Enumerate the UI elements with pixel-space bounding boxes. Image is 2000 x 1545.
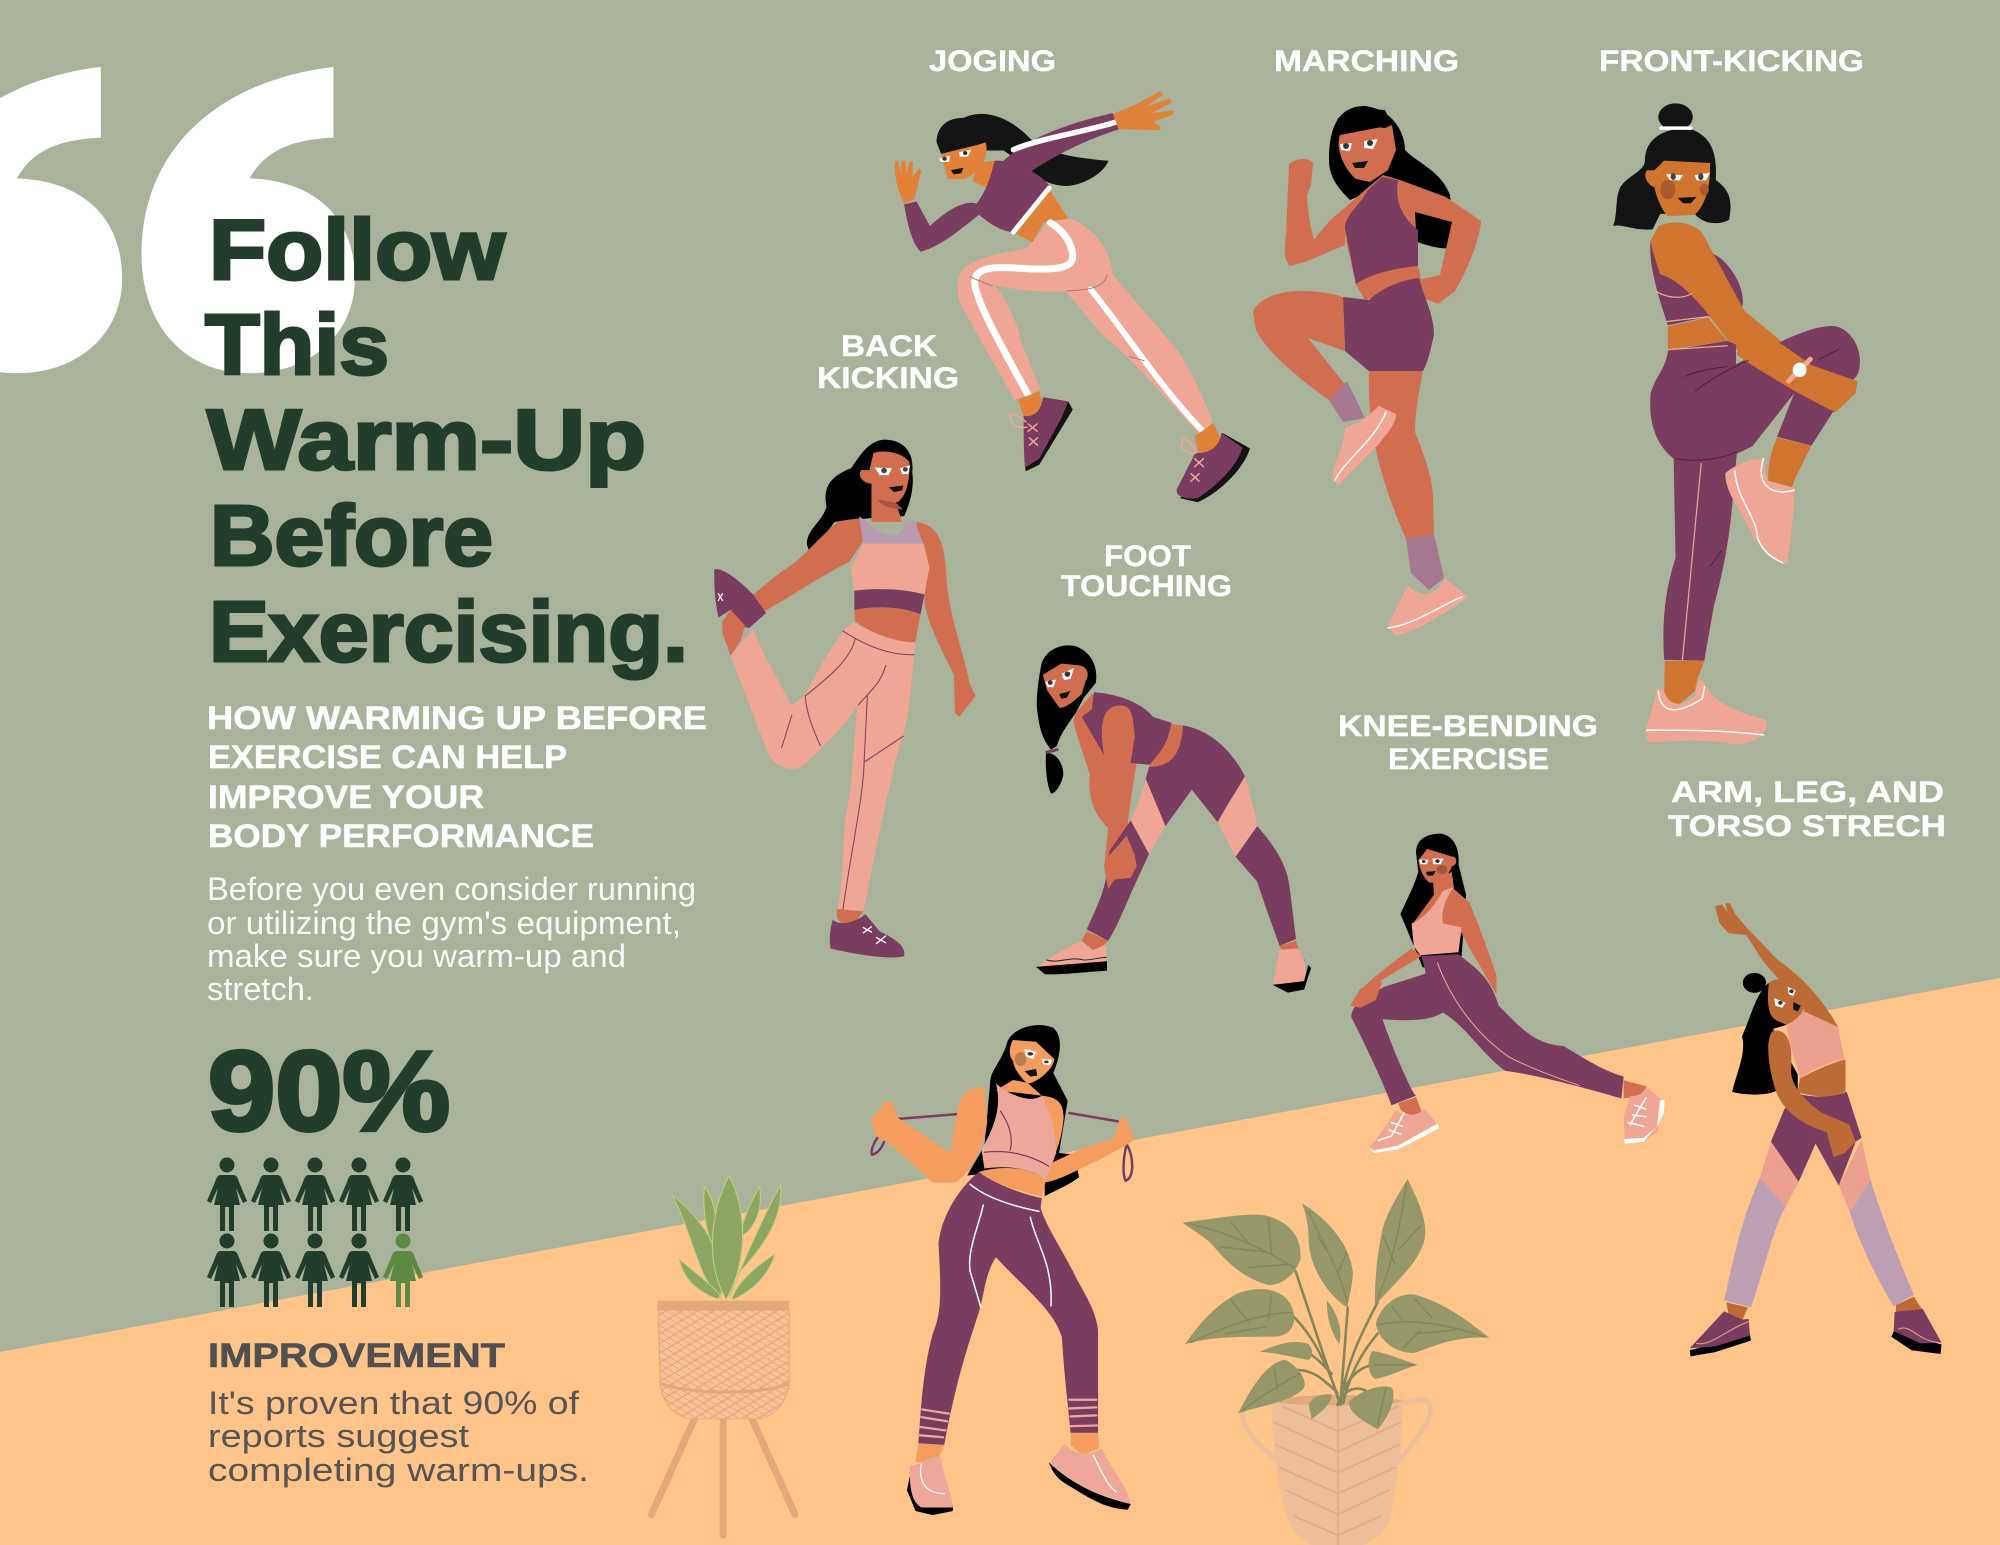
label: foot touching: TOUCHING xyxy=(1061,570,1232,603)
figure: arm, leg and torso stretch xyxy=(1690,903,1941,1356)
label: arm, leg and torso stretch: TORSO STRECH xyxy=(1668,810,1946,843)
floor diagonal xyxy=(0,978,2000,1545)
intro text: stretch. xyxy=(207,971,314,1007)
plant: leafy plant in vase xyxy=(1182,1179,1490,1545)
label: knee-bending exercise xyxy=(1338,710,1598,776)
subheading: EXERCISE CAN HELP xyxy=(208,739,567,775)
improvement text: completing warm-ups. xyxy=(208,1452,589,1488)
title: Follow xyxy=(209,203,506,298)
subheading xyxy=(207,700,707,854)
title: This xyxy=(205,298,389,393)
subheading: BODY PERFORMANCE xyxy=(208,818,594,854)
title: Before xyxy=(210,489,493,584)
figure: jogging xyxy=(895,91,1250,502)
title xyxy=(205,203,688,680)
intro text: make sure you warm-up and xyxy=(207,938,626,974)
improvement text: It's proven that 90% of xyxy=(208,1385,579,1421)
label: knee-bending exercise: EXERCISE xyxy=(1388,743,1549,776)
improvement heading: IMPROVEMENT xyxy=(208,1337,505,1375)
improvement text: reports suggest xyxy=(208,1418,469,1454)
label: knee-bending exercise: KNEE-BENDING xyxy=(1338,710,1598,743)
subheading: IMPROVE YOUR xyxy=(208,779,484,815)
stat: 90%: 90% xyxy=(208,1028,450,1154)
label: front-kicking: FRONT-KICKING xyxy=(1599,45,1864,78)
label: foot touching: FOOT xyxy=(1104,540,1191,573)
label: foot touching xyxy=(1061,540,1232,603)
label: arm, leg and torso stretch xyxy=(1668,776,1946,843)
improvement text xyxy=(208,1385,589,1488)
intro text: or utilizing the gym's equipment, xyxy=(207,905,681,941)
title: Warm-Up xyxy=(207,393,646,488)
figure: knee-bending exercise xyxy=(1350,834,1665,1153)
title: Exercising. xyxy=(209,585,688,680)
icon: quotation mark xyxy=(0,67,355,373)
figure: marching xyxy=(1253,106,1481,636)
plant: snake plant in basket on stand xyxy=(651,1176,795,1535)
figure: foot touching xyxy=(1036,645,1311,993)
label: back kicking: BACK xyxy=(841,330,937,363)
figure: rope-stretch xyxy=(871,1025,1135,1515)
intro text xyxy=(207,871,696,1007)
label: back kicking: KICKING xyxy=(817,362,959,395)
figure: front-kicking xyxy=(1613,103,1860,745)
label: back kicking xyxy=(817,330,959,395)
label: joging: JOGING xyxy=(929,45,1056,78)
subheading: HOW WARMING UP BEFORE xyxy=(207,700,707,736)
label: marching: MARCHING xyxy=(1274,45,1459,78)
label: arm, leg and torso stretch: ARM, LEG, AND xyxy=(1671,776,1944,809)
intro text: Before you even consider running xyxy=(207,871,696,907)
pictogram: 9 of 10 people xyxy=(207,1158,423,1307)
figure: back kicking xyxy=(714,440,976,957)
